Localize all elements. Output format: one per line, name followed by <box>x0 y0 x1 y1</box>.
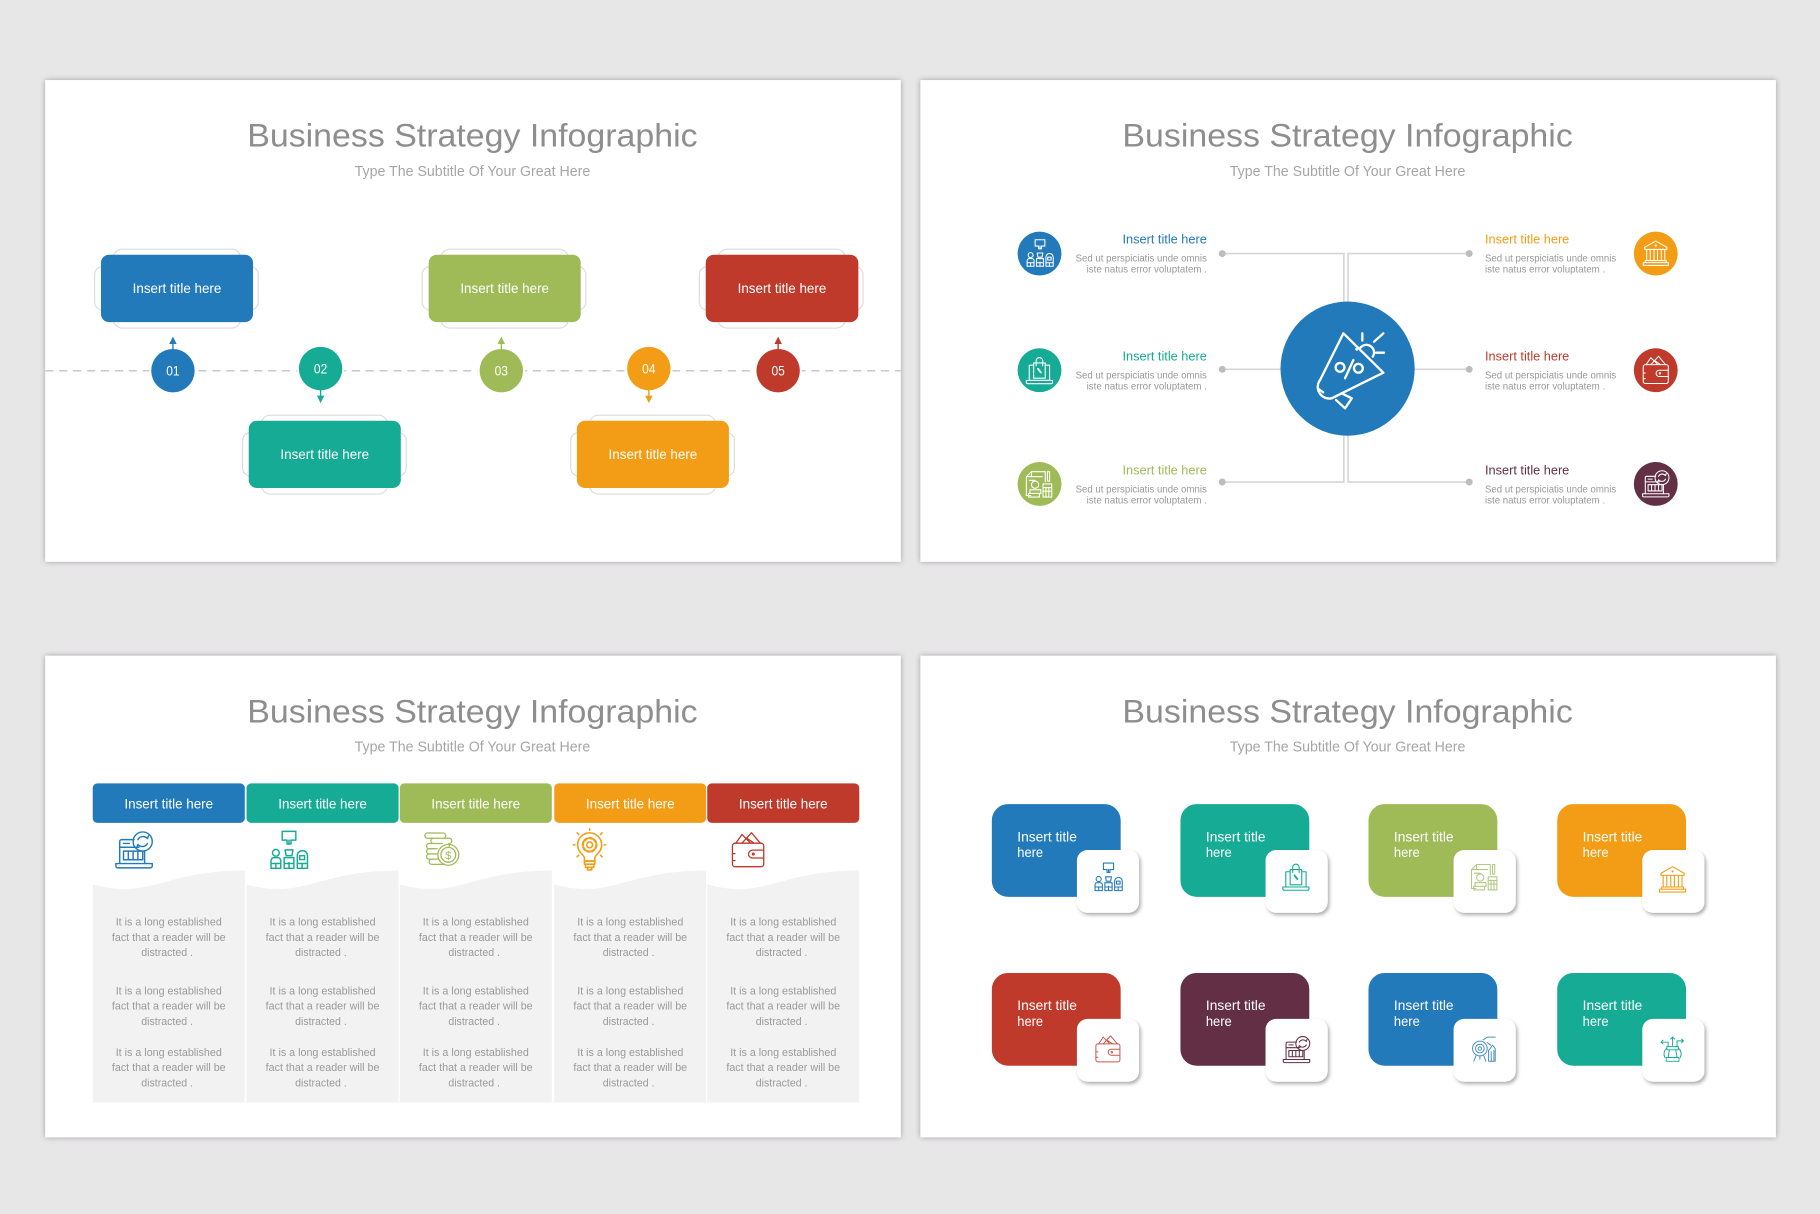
column 3: It is a long established <box>423 985 529 997</box>
panel: hub diagram <box>920 80 1776 562</box>
panel: five column table <box>45 656 901 1137</box>
card 1 blue: Insert title <box>1017 828 1077 844</box>
marker 01 with arrow: 01 <box>166 363 180 379</box>
column 1: fact that a reader will be <box>112 1062 226 1074</box>
column 5: Insert title here <box>739 795 828 811</box>
card 7 blue: here <box>1394 1013 1420 1029</box>
card 8 teal: Insert title <box>1583 997 1643 1013</box>
card 5 red: here <box>1017 1013 1043 1029</box>
card 6 maroon: here <box>1206 1013 1232 1029</box>
central circle with megaphone icon <box>1280 302 1415 436</box>
card 2 teal: here <box>1206 844 1232 860</box>
column 3: It is a long established <box>423 1047 529 1059</box>
card 4 orange: Insert title <box>1583 828 1643 844</box>
title: Business Strategy Infographic <box>247 118 698 154</box>
column 4: distracted . <box>603 1078 654 1090</box>
subtitle: Type The Subtitle Of Your Great Here <box>355 740 590 756</box>
card 6 maroon <box>1180 973 1328 1082</box>
marker 02 with arrow <box>297 345 344 403</box>
marker 04 with arrow: 04 <box>642 361 656 377</box>
column 2: distracted . <box>295 1016 347 1028</box>
marker 04 with arrow <box>625 345 673 403</box>
card 3 green <box>1368 804 1516 913</box>
title: Business Strategy Infographic <box>247 693 698 729</box>
card 2 teal: Insert title <box>1206 828 1266 844</box>
card 2 teal <box>1180 804 1328 913</box>
item: teal left middle <box>1018 348 1207 393</box>
card 1 blue <box>992 804 1139 913</box>
column 1: distracted . <box>141 947 193 959</box>
column 4: distracted . <box>603 947 654 959</box>
item: blue left top: iste natus error voluptatem . <box>1087 265 1207 276</box>
item: teal left middle: Insert title here <box>1123 349 1207 364</box>
card 6 maroon: Insert title <box>1206 997 1266 1013</box>
column 2: fact that a reader will be <box>266 1000 379 1012</box>
item: green left bottom: Insert title here <box>1123 462 1207 477</box>
column 2: fact that a reader will be <box>266 932 379 944</box>
item: maroon right bottom <box>1485 462 1678 507</box>
item: maroon right bottom: Insert title here <box>1485 462 1569 477</box>
card 5 red <box>992 973 1139 1082</box>
column 2: Insert title here <box>278 795 367 811</box>
column 2: It is a long established <box>270 917 376 929</box>
box: teal title: Insert title here <box>280 446 369 462</box>
box: green title: Insert title here <box>460 280 549 296</box>
item: red right middle: Sed ut perspiciatis unde omnis <box>1485 371 1616 382</box>
box: red title <box>699 249 863 328</box>
title: Business Strategy Infographic <box>1122 693 1573 729</box>
column 2: distracted . <box>295 1078 347 1090</box>
marker 01 with arrow <box>149 337 197 394</box>
box: green title <box>422 249 586 328</box>
column 3: Insert title here <box>431 795 520 811</box>
item: blue left top: Sed ut perspiciatis unde omnis <box>1076 254 1207 265</box>
column 3: distracted . <box>448 1016 500 1028</box>
column 4: distracted . <box>603 1016 654 1028</box>
item: maroon right bottom: Sed ut perspiciatis unde omnis <box>1485 485 1616 496</box>
card 4 orange <box>1557 804 1704 913</box>
card 7 blue <box>1368 973 1516 1082</box>
item: orange right top: Sed ut perspiciatis unde omnis <box>1485 254 1616 265</box>
column 4: fact that a reader will be <box>573 932 687 944</box>
box: red title: Insert title here <box>738 280 827 296</box>
column 2 <box>247 783 399 1103</box>
card 8 teal <box>1557 973 1704 1082</box>
panel: timeline <box>45 80 901 562</box>
title: Business Strategy Infographic <box>1122 118 1573 154</box>
card 4 orange: here <box>1583 844 1609 860</box>
box: orange title <box>571 415 734 494</box>
column 1: It is a long established <box>116 917 222 929</box>
column 1: distracted . <box>141 1078 193 1090</box>
item: maroon right bottom: iste natus error voluptatem . <box>1485 496 1605 507</box>
column 5: fact that a reader will be <box>726 1062 840 1074</box>
column 5: distracted . <box>756 1016 807 1028</box>
column 1: It is a long established <box>116 1047 222 1059</box>
column 5: It is a long established <box>730 985 836 997</box>
marker 02 with arrow: 02 <box>314 361 327 377</box>
box: orange title: Insert title here <box>609 446 697 462</box>
subtitle: Type The Subtitle Of Your Great Here <box>355 164 590 180</box>
column 1: distracted . <box>141 1016 193 1028</box>
column 4: fact that a reader will be <box>573 1000 687 1012</box>
item: teal left middle: iste natus error voluptatem . <box>1087 382 1207 393</box>
subtitle: Type The Subtitle Of Your Great Here <box>1230 164 1465 180</box>
column 3: It is a long established <box>423 917 529 929</box>
item: orange right top <box>1485 231 1678 276</box>
column 3: fact that a reader will be <box>419 1062 533 1074</box>
item: green left bottom: iste natus error voluptatem . <box>1087 496 1207 507</box>
card 3 green: here <box>1394 844 1420 860</box>
item: green left bottom <box>1018 462 1207 507</box>
column 5: distracted . <box>756 1078 807 1090</box>
subtitle: Type The Subtitle Of Your Great Here <box>1230 740 1465 756</box>
panel: icon cards <box>920 656 1776 1137</box>
box: blue title <box>95 249 258 328</box>
column 5: fact that a reader will be <box>726 1000 840 1012</box>
card 8 teal: here <box>1583 1013 1609 1029</box>
column 3: fact that a reader will be <box>419 932 533 944</box>
column 3 <box>400 783 552 1103</box>
box: blue title: Insert title here <box>133 280 222 296</box>
column 5: fact that a reader will be <box>726 932 840 944</box>
column 3: distracted . <box>448 1078 500 1090</box>
column 5 <box>707 783 859 1103</box>
box: teal title <box>243 415 406 494</box>
column 2: fact that a reader will be <box>266 1062 379 1074</box>
column 4: Insert title here <box>586 795 675 811</box>
card 1 blue: here <box>1017 844 1043 860</box>
item: orange right top: Insert title here <box>1485 231 1569 246</box>
connector lines <box>1219 250 1473 485</box>
column 1: Insert title here <box>124 795 213 811</box>
card 3 green: Insert title <box>1394 828 1454 844</box>
column 5: It is a long established <box>730 1047 836 1059</box>
column 3: distracted . <box>448 947 500 959</box>
column 4: fact that a reader will be <box>573 1062 687 1074</box>
column 2: It is a long established <box>270 1047 376 1059</box>
column 4: It is a long established <box>577 1047 683 1059</box>
item: teal left middle: Sed ut perspiciatis unde omnis <box>1076 371 1207 382</box>
column 1: It is a long established <box>116 985 222 997</box>
item: orange right top: iste natus error voluptatem . <box>1485 265 1605 276</box>
marker 05 with arrow <box>754 337 802 394</box>
column 5: It is a long established <box>730 917 836 929</box>
card 5 red: Insert title <box>1017 997 1077 1013</box>
column 2: It is a long established <box>270 985 376 997</box>
column 4: It is a long established <box>577 985 683 997</box>
item: blue left top <box>1018 231 1207 276</box>
item: red right middle <box>1485 348 1678 393</box>
item: green left bottom: Sed ut perspiciatis unde omnis <box>1076 485 1207 496</box>
marker 03 with arrow: 03 <box>495 363 508 379</box>
column 2: distracted . <box>295 947 347 959</box>
marker 05 with arrow: 05 <box>771 363 785 379</box>
item: red right middle: iste natus error voluptatem . <box>1485 382 1605 393</box>
column 1: fact that a reader will be <box>112 932 226 944</box>
column 1 <box>93 783 245 1103</box>
item: blue left top: Insert title here <box>1123 231 1207 246</box>
column 4: It is a long established <box>577 917 683 929</box>
column 3: fact that a reader will be <box>419 1000 533 1012</box>
marker 03 with arrow <box>478 337 525 394</box>
card 7 blue: Insert title <box>1394 997 1454 1013</box>
column 1: fact that a reader will be <box>112 1000 226 1012</box>
column 4 <box>554 783 706 1103</box>
item: red right middle: Insert title here <box>1485 349 1569 364</box>
column 5: distracted . <box>756 947 807 959</box>
